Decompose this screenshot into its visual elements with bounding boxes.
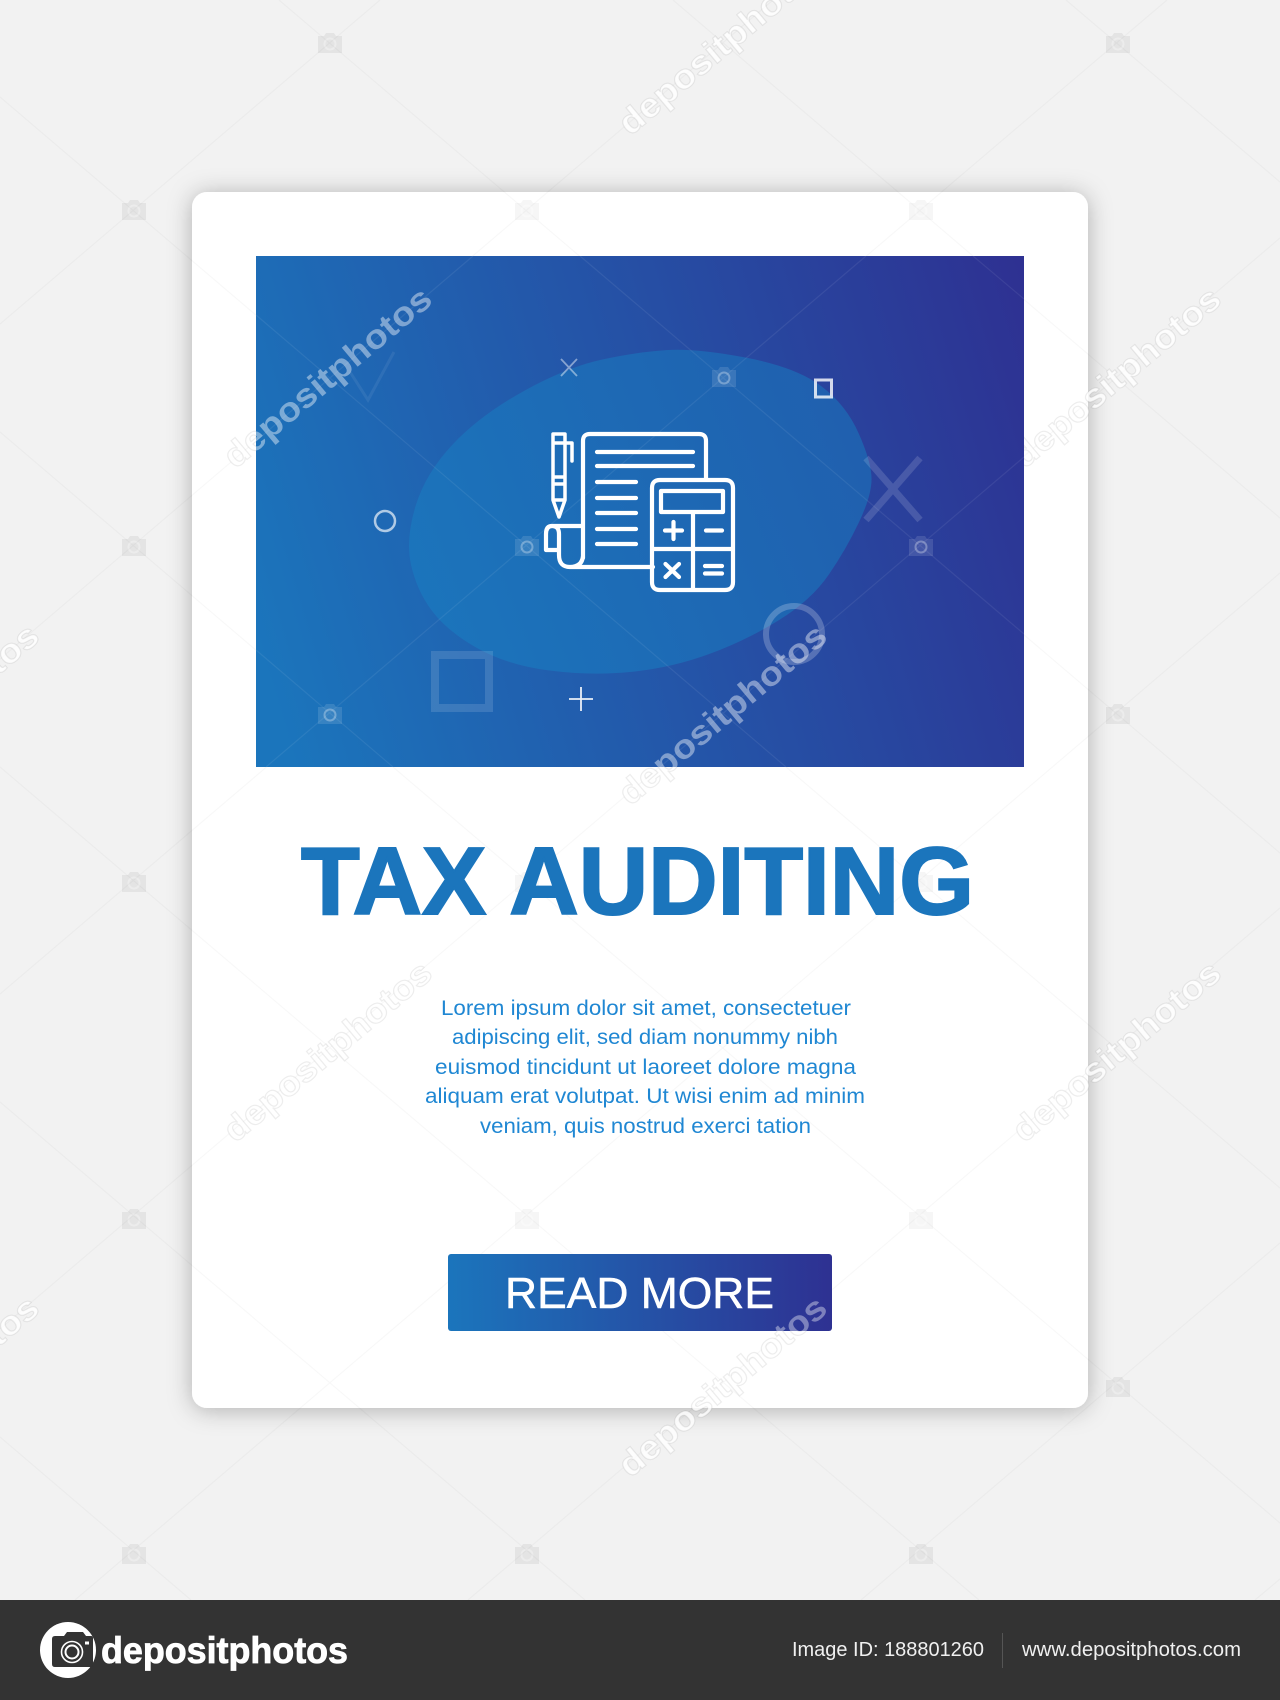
icon part: text lines [597,452,693,544]
panel camera watermarks [318,367,933,724]
button: read more: READ MORE [505,1269,774,1318]
decoration: faint check mark [350,352,394,400]
divider [1002,1633,1003,1668]
watermark text on background and card: depositphotos [216,279,440,476]
watermark on panel: depositphotos [611,616,835,813]
decoration: large square [435,655,489,708]
icon part: paper scroll [546,434,706,567]
watermark text on background and card: depositphotos [611,1288,835,1485]
decoration: large x [866,458,920,520]
panel lattice lines [256,256,1024,767]
body text: veniam, quis nostrud exerci tation [480,1114,811,1138]
logo mark [40,1622,96,1678]
body text: Lorem ipsum dolor sit amet, consectetuer [441,996,851,1020]
body text: aliquam erat volutpat. Ut wisi enim ad minim [425,1084,865,1108]
website: www.depositphotos.com [1021,1639,1241,1661]
watermark on panel [256,292,826,767]
watermark text on background and card: depositphotos [1005,279,1229,476]
image id: Image ID: 188801260 [792,1639,984,1661]
watermark text on background and card: depositphotos [1005,953,1229,1150]
icon: tax document and calculator [546,434,733,590]
logo wordmark: depositphotos [101,1630,348,1671]
footer bar [0,1600,1280,1700]
body text: adipiscing elit, sed diam nonummy nibh [452,1025,838,1049]
body text [425,996,865,1138]
decoration: small square [816,380,832,397]
watermark on button: depositphotos [611,1288,835,1485]
icon part: pen [553,434,572,517]
watermark text on background and card: depositphotos [611,616,835,813]
watermark text on background and card: depositphotos [216,953,440,1150]
panel: hero gradient [256,256,1024,767]
title: TAX AUDITING [301,828,974,935]
decoration: small x [561,359,577,376]
background camera watermarks [122,33,1130,1564]
button: read more [448,1254,832,1331]
decoration: plus [569,687,593,711]
decoration: small circle [375,511,395,531]
decoration: large circle [766,606,822,662]
card camera watermarks [515,200,933,1229]
card [192,192,1088,1408]
icon part: calculator symbols [665,522,722,577]
blob shape [409,350,872,674]
body text: euismod tincidunt ut laoreet dolore magna [435,1055,856,1079]
watermark on panel: depositphotos [216,279,440,476]
icon part: calculator [652,480,733,590]
